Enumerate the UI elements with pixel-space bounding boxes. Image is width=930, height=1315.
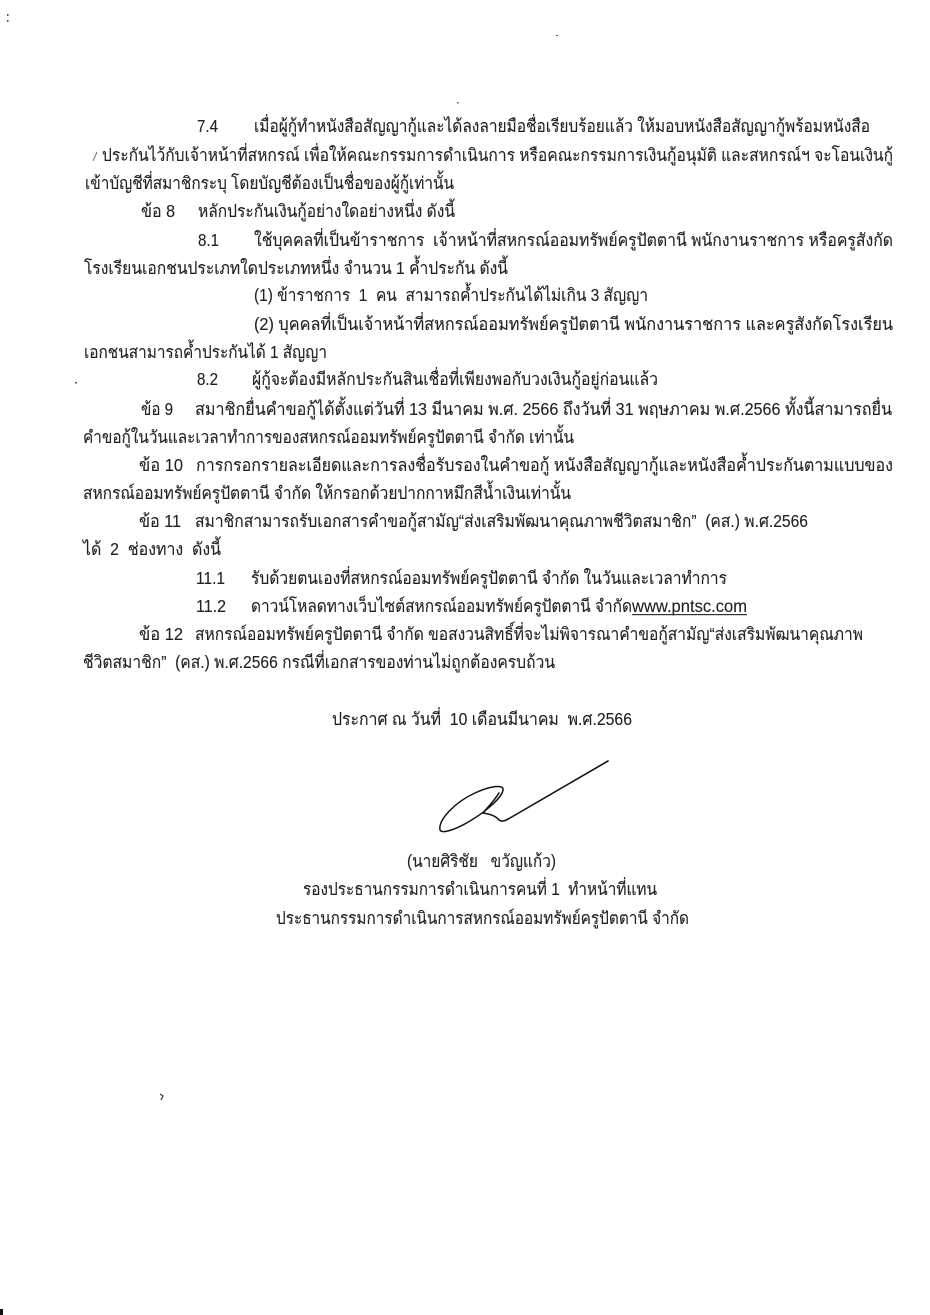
- clause 11 paragraph: [81, 511, 808, 559]
- clause 8.2 paragraph: 8.2: [197, 369, 218, 389]
- clause 12 paragraph: [83, 621, 863, 673]
- clause 10 paragraph: สหกรณ์ออมทรัพย์ครูปัตตานี จำกัด ให้กรอกด้วยปากกาหมึกสีน้ำเงินเท่านั้น: [83, 480, 571, 504]
- signatory block: (นายศิริชัย ขวัญแก้ว): [407, 851, 556, 871]
- clause 8.1 paragraph: 8.1: [198, 230, 219, 250]
- clause 10 paragraph: [83, 452, 893, 504]
- clause 8.1 paragraph: [84, 228, 893, 362]
- clause 8.2 paragraph: ผู้กู้จะต้องมีหลักประกันสินเชื่อที่เพียงพอกับวงเงินกู้อยู่ก่อนแล้ว: [252, 367, 658, 390]
- clause 8.1 paragraph: โรงเรียนเอกชนประเภทใดประเภทหนึ่ง จำนวน 1 ค้ำประกัน ดังนี้: [84, 255, 508, 278]
- clause 9 paragraph: สมาชิกยื่นคำขอกู้ได้ตั้งแต่วันที่ 13 มีนาคม พ.ศ. 2566 ถึงวันที่ 31 พฤษภาคม พ.ศ.2566 ทั้งนี้สามารถยื่น: [195, 396, 892, 420]
- clause 7.4 paragraph: [85, 114, 893, 194]
- clause 11.2 paragraph with website link: ดาวน์โหลดทางเว็บไซต์สหกรณ์ออมทรัพย์ครูปัตตานี จำกัด: [251, 595, 632, 617]
- clause 11 paragraph: ได้ 2 ช่องทาง ดังนี้: [81, 536, 221, 559]
- clause 12 paragraph: ชีวิตสมาชิก” (คส.) พ.ศ.2566 กรณีที่เอกสารของท่านไม่ถูกต้องครบถ้วน: [83, 650, 555, 673]
- clause 8.1 paragraph: (1) ข้าราชการ 1 คน สามารถค้ำประกันได้ไม่เกิน 3 สัญญา: [254, 282, 648, 305]
- clause 8.1 paragraph: (2) บุคคลที่เป็นเจ้าหน้าที่สหกรณ์ออมทรัพย์ครูปัตตานี พนักงานราชการ และครูสังกัดโรงเรียน: [254, 312, 893, 335]
- clause 10 paragraph: ข้อ 10: [139, 455, 183, 475]
- clause 8 heading: หลักประกันเงินกู้อย่างใดอย่างหนึ่ง ดังนี้: [198, 198, 455, 222]
- signature: [440, 761, 608, 832]
- clause 7.4 paragraph: 7.4: [197, 116, 218, 136]
- clause 11.1 paragraph: รับด้วยตนเองที่สหกรณ์ออมทรัพย์ครูปัตตานี จำกัด ในวันและเวลาทำการ: [251, 566, 727, 589]
- clause 7.4 paragraph: เข้าบัญชีที่สมาชิกระบุ โดยบัญชีต้องเป็นชื่อของผู้กู้เท่านั้น: [85, 170, 454, 194]
- clause 9 paragraph: คำขอกู้ในวันและเวลาทำการของสหกรณ์ออมทรัพย์ครูปัตตานี จำกัด เท่านั้น: [83, 424, 574, 448]
- signatory block: ประธานกรรมการดำเนินการสหกรณ์ออมทรัพย์ครูปัตตานี จำกัด: [276, 908, 689, 929]
- clause 8.1 paragraph: เอกชนสามารถค้ำประกันได้ 1 สัญญา: [84, 339, 327, 362]
- clause 9 paragraph: [83, 396, 892, 448]
- signatory block: รองประธานกรรมการดำเนินการคนที่ 1 ทำหน้าที่แทน: [303, 877, 657, 899]
- signatory block: [276, 851, 689, 929]
- clause 11.2 paragraph with website link: 11.2: [196, 596, 226, 616]
- clause 11 paragraph: สมาชิกสามารถรับเอกสารคำขอกู้สามัญ“ส่งเสริมพัฒนาคุณภาพชีวิตสมาชิก” (คส.) พ.ศ.2566: [195, 511, 808, 532]
- clause 8 heading: [141, 198, 455, 222]
- clause 12 paragraph: ข้อ 12: [139, 624, 183, 644]
- clause 11.1 paragraph: 11.1: [196, 568, 225, 588]
- clause 12 paragraph: สหกรณ์ออมทรัพย์ครูปัตตานี จำกัด ขอสงวนสิทธิ์ที่จะไม่พิจารณาคำขอกู้สามัญ“ส่งเสริมพัฒนาคุณภาพ: [195, 621, 863, 645]
- announcement date: ประกาศ ณ วันที่ 10 เดือนมีนาคม พ.ศ.2566: [332, 707, 632, 729]
- scan specks: [0, 14, 558, 1315]
- clause 11.2 paragraph with website link: www.pntsc.com: [631, 596, 747, 616]
- clause 8 heading: ข้อ 8: [141, 201, 175, 221]
- clause 11 paragraph: ข้อ 11: [139, 511, 181, 531]
- clause 9 paragraph: ข้อ 9: [141, 399, 173, 419]
